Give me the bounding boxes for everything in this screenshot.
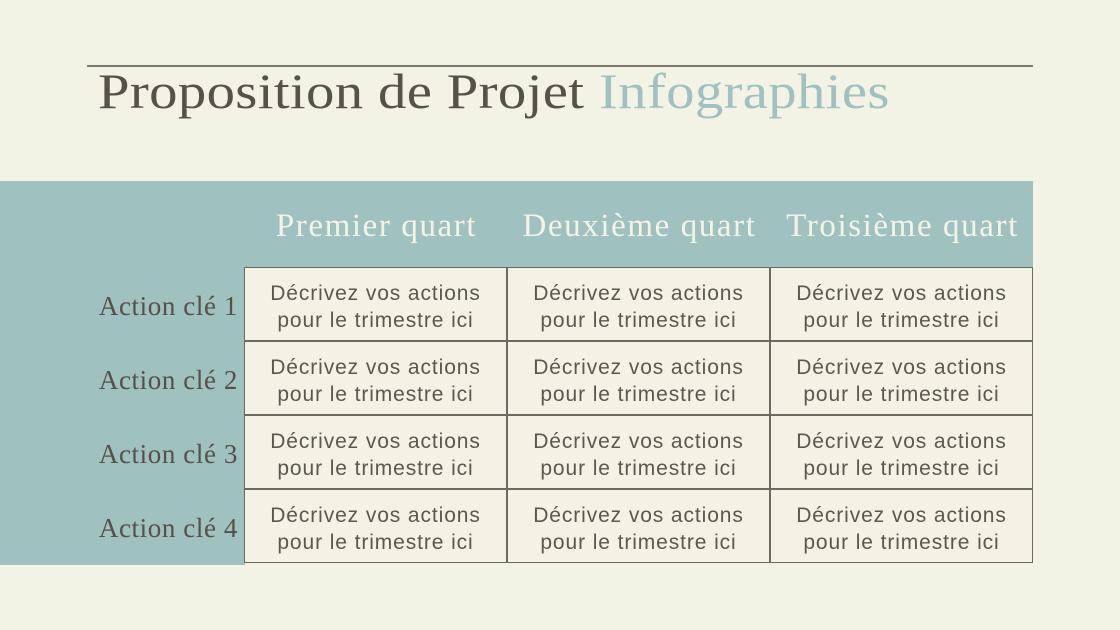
table grid: pour le trimestre ici [540, 383, 737, 406]
table grid: pour le trimestre ici [803, 531, 1000, 554]
table grid: Décrivez vos actions [533, 504, 744, 527]
table grid: pour le trimestre ici [803, 383, 1000, 406]
row label 1: Action clé 1 [99, 291, 238, 321]
table grid: pour le trimestre ici [540, 309, 737, 332]
table grid: pour le trimestre ici [277, 457, 474, 480]
table grid: Décrivez vos actions [533, 356, 744, 379]
top rule [87, 65, 1033, 67]
table grid: pour le trimestre ici [277, 383, 474, 406]
table grid: Décrivez vos actions [796, 504, 1007, 527]
table grid: Décrivez vos actions [533, 430, 744, 453]
column header: Premier quart: Premier quart [276, 208, 477, 244]
table grid: Décrivez vos actions [796, 430, 1007, 453]
table grid: pour le trimestre ici [803, 457, 1000, 480]
panel: teal background [0, 181, 1033, 565]
table grid: Décrivez vos actions [533, 282, 744, 305]
row label 2: Action clé 2 [99, 365, 238, 395]
row label 3: Action clé 3 [99, 439, 238, 469]
table grid: Décrivez vos actions [270, 504, 481, 527]
table grid: Décrivez vos actions [796, 356, 1007, 379]
table grid: Décrivez vos actions [270, 356, 481, 379]
row label 4: Action clé 4 [99, 513, 238, 543]
table grid: Décrivez vos actions [796, 282, 1007, 305]
table grid: pour le trimestre ici [540, 457, 737, 480]
table grid: pour le trimestre ici [803, 309, 1000, 332]
table grid: pour le trimestre ici [540, 531, 737, 554]
column header: Troisième quart: Troisième quart [786, 208, 1019, 244]
table grid: Décrivez vos actions [270, 430, 481, 453]
title: Proposition de Projet Infographies [98, 63, 890, 119]
table grid: Décrivez vos actions [270, 282, 481, 305]
column header: Deuxième quart: Deuxième quart [522, 208, 757, 244]
table grid: pour le trimestre ici [277, 531, 474, 554]
table grid: pour le trimestre ici [277, 309, 474, 332]
